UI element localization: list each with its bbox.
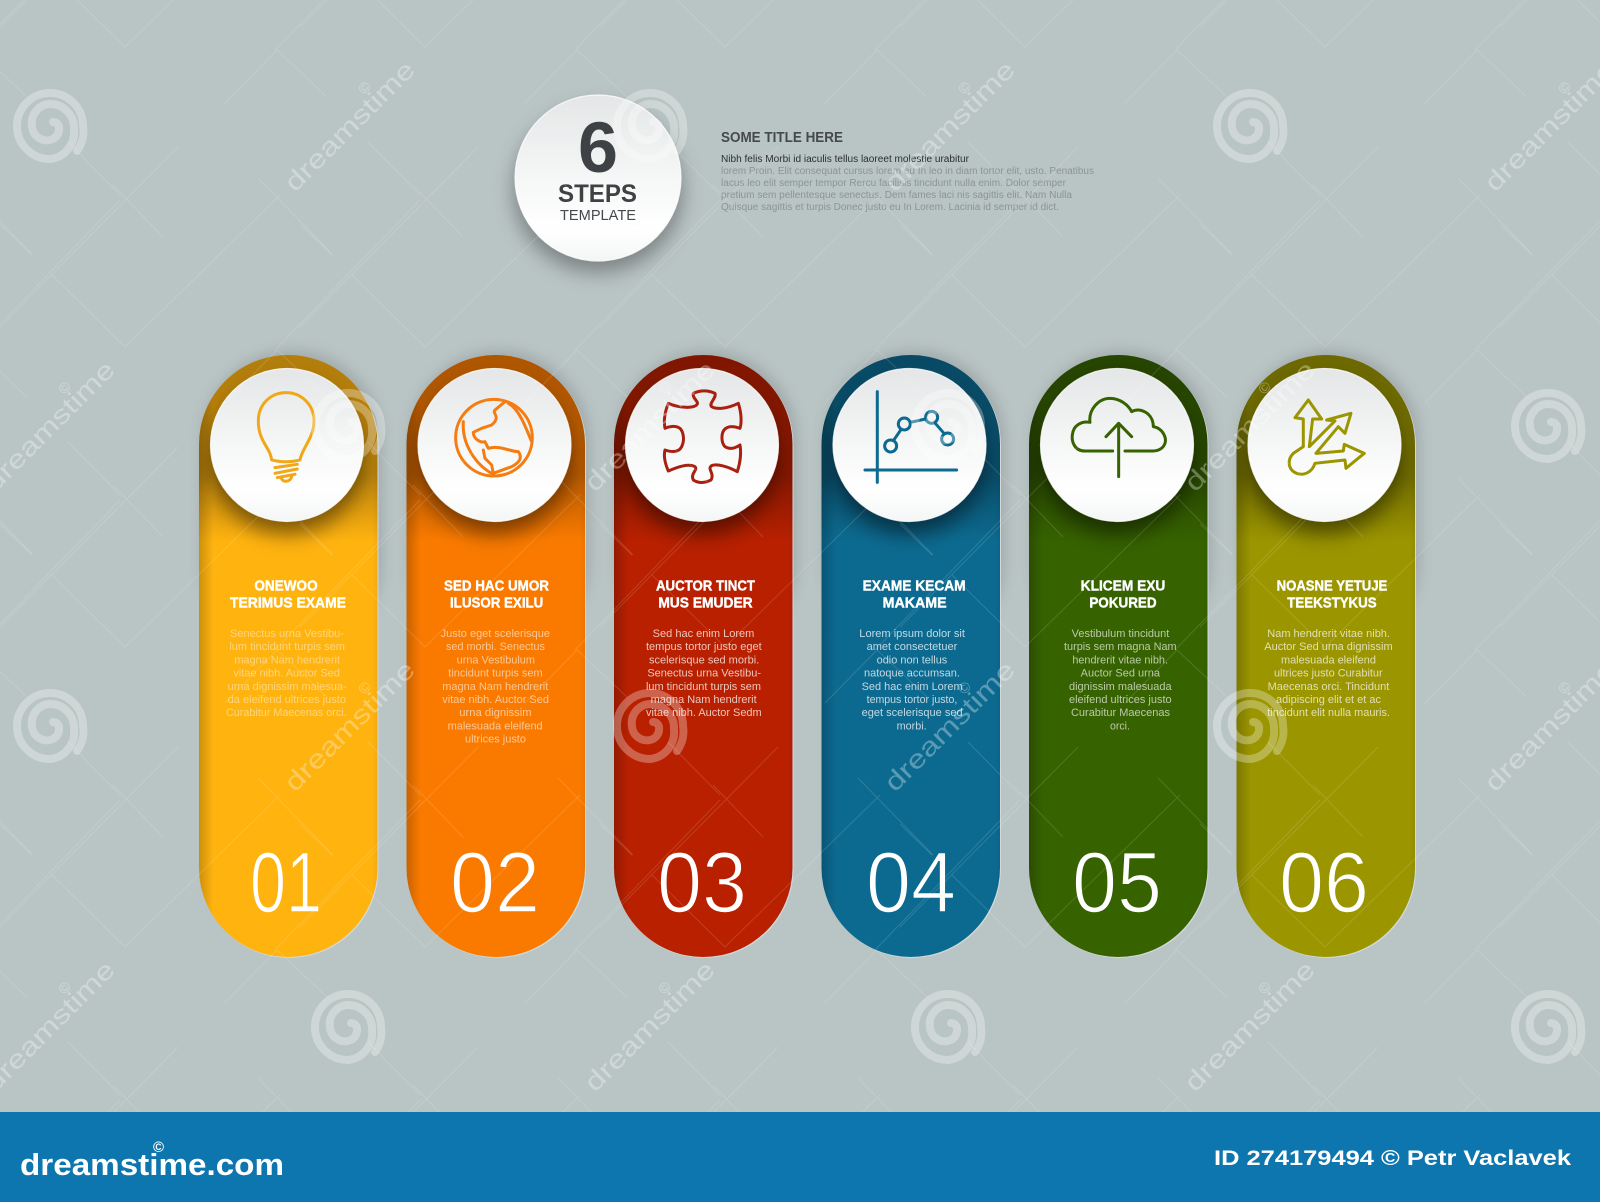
number 05: 05 bbox=[1072, 835, 1162, 931]
watermark layer: dreamstime bbox=[278, 54, 421, 197]
step 06 text: ultrices justo Curabitur bbox=[1274, 668, 1383, 680]
step 06 text: Maecenas orci. Tincidunt bbox=[1268, 681, 1390, 693]
step 03 text: Sed hac enim Lorem bbox=[653, 628, 754, 640]
step 06 text: adipiscing elit et et ac bbox=[1276, 694, 1381, 706]
icon: diverging arrows bbox=[1289, 400, 1364, 474]
step 02 text bbox=[441, 579, 550, 746]
step 05 text bbox=[1064, 579, 1177, 732]
watermark layer: © bbox=[1555, 78, 1575, 98]
watermark layer: © bbox=[1255, 978, 1275, 998]
watermark layer: © bbox=[355, 78, 375, 98]
icon: light bulb bbox=[258, 393, 314, 481]
step 02 text: malesuada eleifend bbox=[448, 720, 543, 732]
step 02 text: magna Nam hendrerit bbox=[442, 681, 549, 693]
step 03 text: scelerisque sed morbi. bbox=[649, 654, 759, 666]
watermark layer: © bbox=[55, 378, 75, 398]
step 01 text: urna dignissim malesua- bbox=[228, 681, 347, 693]
watermark layer: dreamstime bbox=[1478, 54, 1600, 197]
header badge: 6 steps template: STEPS bbox=[558, 180, 637, 208]
watermark layer: © bbox=[1255, 378, 1275, 398]
watermark layer: © bbox=[55, 978, 75, 998]
number 04: 04 bbox=[866, 835, 956, 931]
watermark layer: dreamstime bbox=[1178, 954, 1321, 1097]
step 06 text: Auctor Sed urna dignissim bbox=[1264, 641, 1393, 653]
step 05 text: Vestibulum tincidunt bbox=[1072, 628, 1170, 640]
step 04 text: MAKAME bbox=[883, 596, 947, 612]
step 03 text: lum tincidunt turpis sem bbox=[646, 681, 761, 693]
step 01 text: vitae nibh. Auctor Sed bbox=[233, 668, 340, 680]
step 03 text: vitae nibh. Auctor Sedm bbox=[646, 707, 762, 719]
step 04 text: morbi. bbox=[897, 720, 927, 732]
watermark layer: dreamstime bbox=[578, 354, 721, 497]
pill: step 06 bbox=[1236, 351, 1419, 958]
step 02 text: vitae nibh. Auctor Sed bbox=[442, 694, 549, 706]
panel: step 04 bbox=[822, 351, 1004, 958]
number 01: 01 bbox=[250, 835, 322, 931]
number 02: 02 bbox=[450, 835, 540, 931]
footer bar bbox=[0, 1112, 1600, 1202]
step 01 text: ONEWOO bbox=[254, 579, 318, 595]
step 04 text: Sed hac enim Lorem bbox=[862, 681, 963, 693]
step 04 text: amet consectetuer bbox=[867, 641, 958, 653]
step 03 text: AUCTOR TINCT bbox=[656, 579, 755, 595]
step 05 text: Curabitur Maecenas bbox=[1071, 707, 1170, 719]
watermark layer: dreamstime bbox=[1478, 654, 1600, 797]
step 06 text: tincidunt elit nulla mauris. bbox=[1267, 707, 1390, 719]
step 02 text: ultrices justo bbox=[465, 734, 526, 746]
number 06: 06 bbox=[1279, 835, 1369, 931]
number 03: 03 bbox=[657, 835, 747, 931]
step 03 text: MUS EMUDER bbox=[658, 596, 753, 612]
step 03 text bbox=[646, 579, 762, 719]
step 06 text: malesuada eleifend bbox=[1281, 654, 1376, 666]
step 04 text: tempus tortor justo, bbox=[867, 694, 957, 706]
step 05 text: KLICEM EXU bbox=[1081, 579, 1165, 595]
panel: step 06 bbox=[1236, 351, 1419, 958]
icon: cloud upload bbox=[1072, 398, 1165, 477]
watermark layer: © bbox=[955, 78, 975, 98]
step 01 text bbox=[226, 579, 347, 719]
step 04 text: odio non tellus bbox=[877, 654, 948, 666]
icon: puzzle piece bbox=[664, 391, 741, 482]
step 02 text: SED HAC UMOR bbox=[444, 579, 550, 595]
watermark layer: dreamstime bbox=[578, 954, 721, 1097]
step 04 text: Lorem ipsum dolor sit bbox=[859, 628, 966, 640]
watermark layer: © bbox=[355, 678, 375, 698]
step 05 text: POKURED bbox=[1089, 596, 1157, 612]
pill: step 04 bbox=[822, 351, 1004, 958]
step 03 text: magna Nam hendrerit bbox=[651, 694, 757, 706]
footer bar: © bbox=[153, 1139, 164, 1156]
footer bar: ID 274179494 © Petr Vaclavek bbox=[1214, 1146, 1571, 1170]
step 01 text: Curabitur Maecenas orci. bbox=[226, 707, 347, 719]
step 05 text: orci. bbox=[1110, 720, 1130, 732]
step 01 text: da eleifend ultrices justo bbox=[228, 694, 346, 706]
pill: step 02 bbox=[406, 351, 589, 958]
step 05 text: Auctor Sed urna bbox=[1081, 668, 1161, 680]
header text block: SOME TITLE HERE bbox=[721, 130, 843, 146]
step 01 text: magna Nam hendrerit bbox=[234, 654, 341, 666]
step 03 text: Senectus urna Vestibu- bbox=[647, 668, 761, 680]
panel: step 05 bbox=[1029, 351, 1212, 958]
panel: step 03 bbox=[614, 351, 796, 958]
step 05 text: eleifend ultrices justo bbox=[1069, 694, 1172, 706]
header text block: Quisque sagittis et turpis Donec justo eu In Lorem. Lacinia id semper id dict. bbox=[721, 202, 1059, 213]
footer bar: dreamstime.com bbox=[20, 1147, 284, 1182]
icon: line chart bbox=[865, 392, 957, 482]
pill: step 01 bbox=[199, 351, 382, 958]
step 05 text: dignissim malesuada bbox=[1069, 681, 1172, 693]
step 02 text: Justo eget scelerisque bbox=[441, 628, 550, 640]
step 06 text: Nam hendrerit vitae nibh. bbox=[1267, 628, 1390, 640]
header badge: 6 steps template bbox=[514, 95, 682, 272]
step 02 text: urna dignissim bbox=[459, 707, 532, 719]
step 05 text: turpis sem magna Nam bbox=[1064, 641, 1177, 653]
step 04 text: eget scelerisque sed bbox=[862, 707, 963, 719]
panel: step 02 bbox=[406, 351, 589, 958]
header text block: pretium sem pellentesque senectus. Dem fames laci nis sagittis elit. Nam Nulla bbox=[721, 190, 1072, 201]
step 04 text: natoque accumsan. bbox=[864, 668, 960, 680]
watermark layer: dreamstime bbox=[878, 54, 1021, 197]
pill: step 05 bbox=[1029, 351, 1212, 958]
watermark layer: © bbox=[955, 678, 975, 698]
watermark layer: © bbox=[655, 378, 675, 398]
watermark layer: dreamstime bbox=[278, 654, 421, 797]
step 02 text: urna Vestibulum bbox=[457, 654, 535, 666]
step 01 text: lum tincidunt turpis sem bbox=[229, 641, 345, 653]
watermark layer: dreamstime bbox=[1178, 354, 1321, 497]
step 02 text: tincidunt turpis sem bbox=[448, 668, 543, 680]
watermark layer: © bbox=[1555, 678, 1575, 698]
header badge: 6 steps template: 6 bbox=[578, 109, 618, 188]
step 06 text bbox=[1264, 579, 1393, 719]
watermark layer: dreamstime bbox=[878, 654, 1021, 797]
header text block: lorem Proin. Elit consequat cursus lorem eu In leo in diam tortor elit, usto. Penatibus bbox=[721, 166, 1094, 177]
step 06 text: TEEKSTYKUS bbox=[1287, 596, 1377, 612]
step 01 text: Senectus urna Vestibu- bbox=[230, 628, 344, 640]
step 05 text: hendrerit vitae nibh. bbox=[1072, 654, 1168, 666]
pill: step 03 bbox=[614, 351, 796, 958]
step 02 text: sed morbi. Senectus bbox=[446, 641, 545, 653]
step 01 text: TERIMUS EXAME bbox=[230, 596, 346, 612]
watermark layer: © bbox=[655, 978, 675, 998]
step 04 text: EXAME KECAM bbox=[863, 579, 966, 595]
header text block bbox=[721, 130, 1094, 213]
header badge: 6 steps template: TEMPLATE bbox=[560, 207, 636, 224]
step 06 text: NOASNE YETUJE bbox=[1277, 579, 1387, 595]
step 03 text: tempus tortor justo eget bbox=[646, 641, 762, 653]
header text block: Nibh felis Morbi id iaculis tellus laoreet molestie urabitur bbox=[721, 154, 970, 165]
icon: globe bbox=[456, 399, 532, 476]
step 04 text bbox=[859, 579, 966, 732]
panel: step 01 bbox=[199, 351, 382, 958]
header text block: lacus leo elit semper tempor Rercu facilisis tincidunt nulla enim. Dolor semper bbox=[721, 178, 1067, 189]
step 02 text: ILUSOR EXILU bbox=[450, 596, 543, 612]
